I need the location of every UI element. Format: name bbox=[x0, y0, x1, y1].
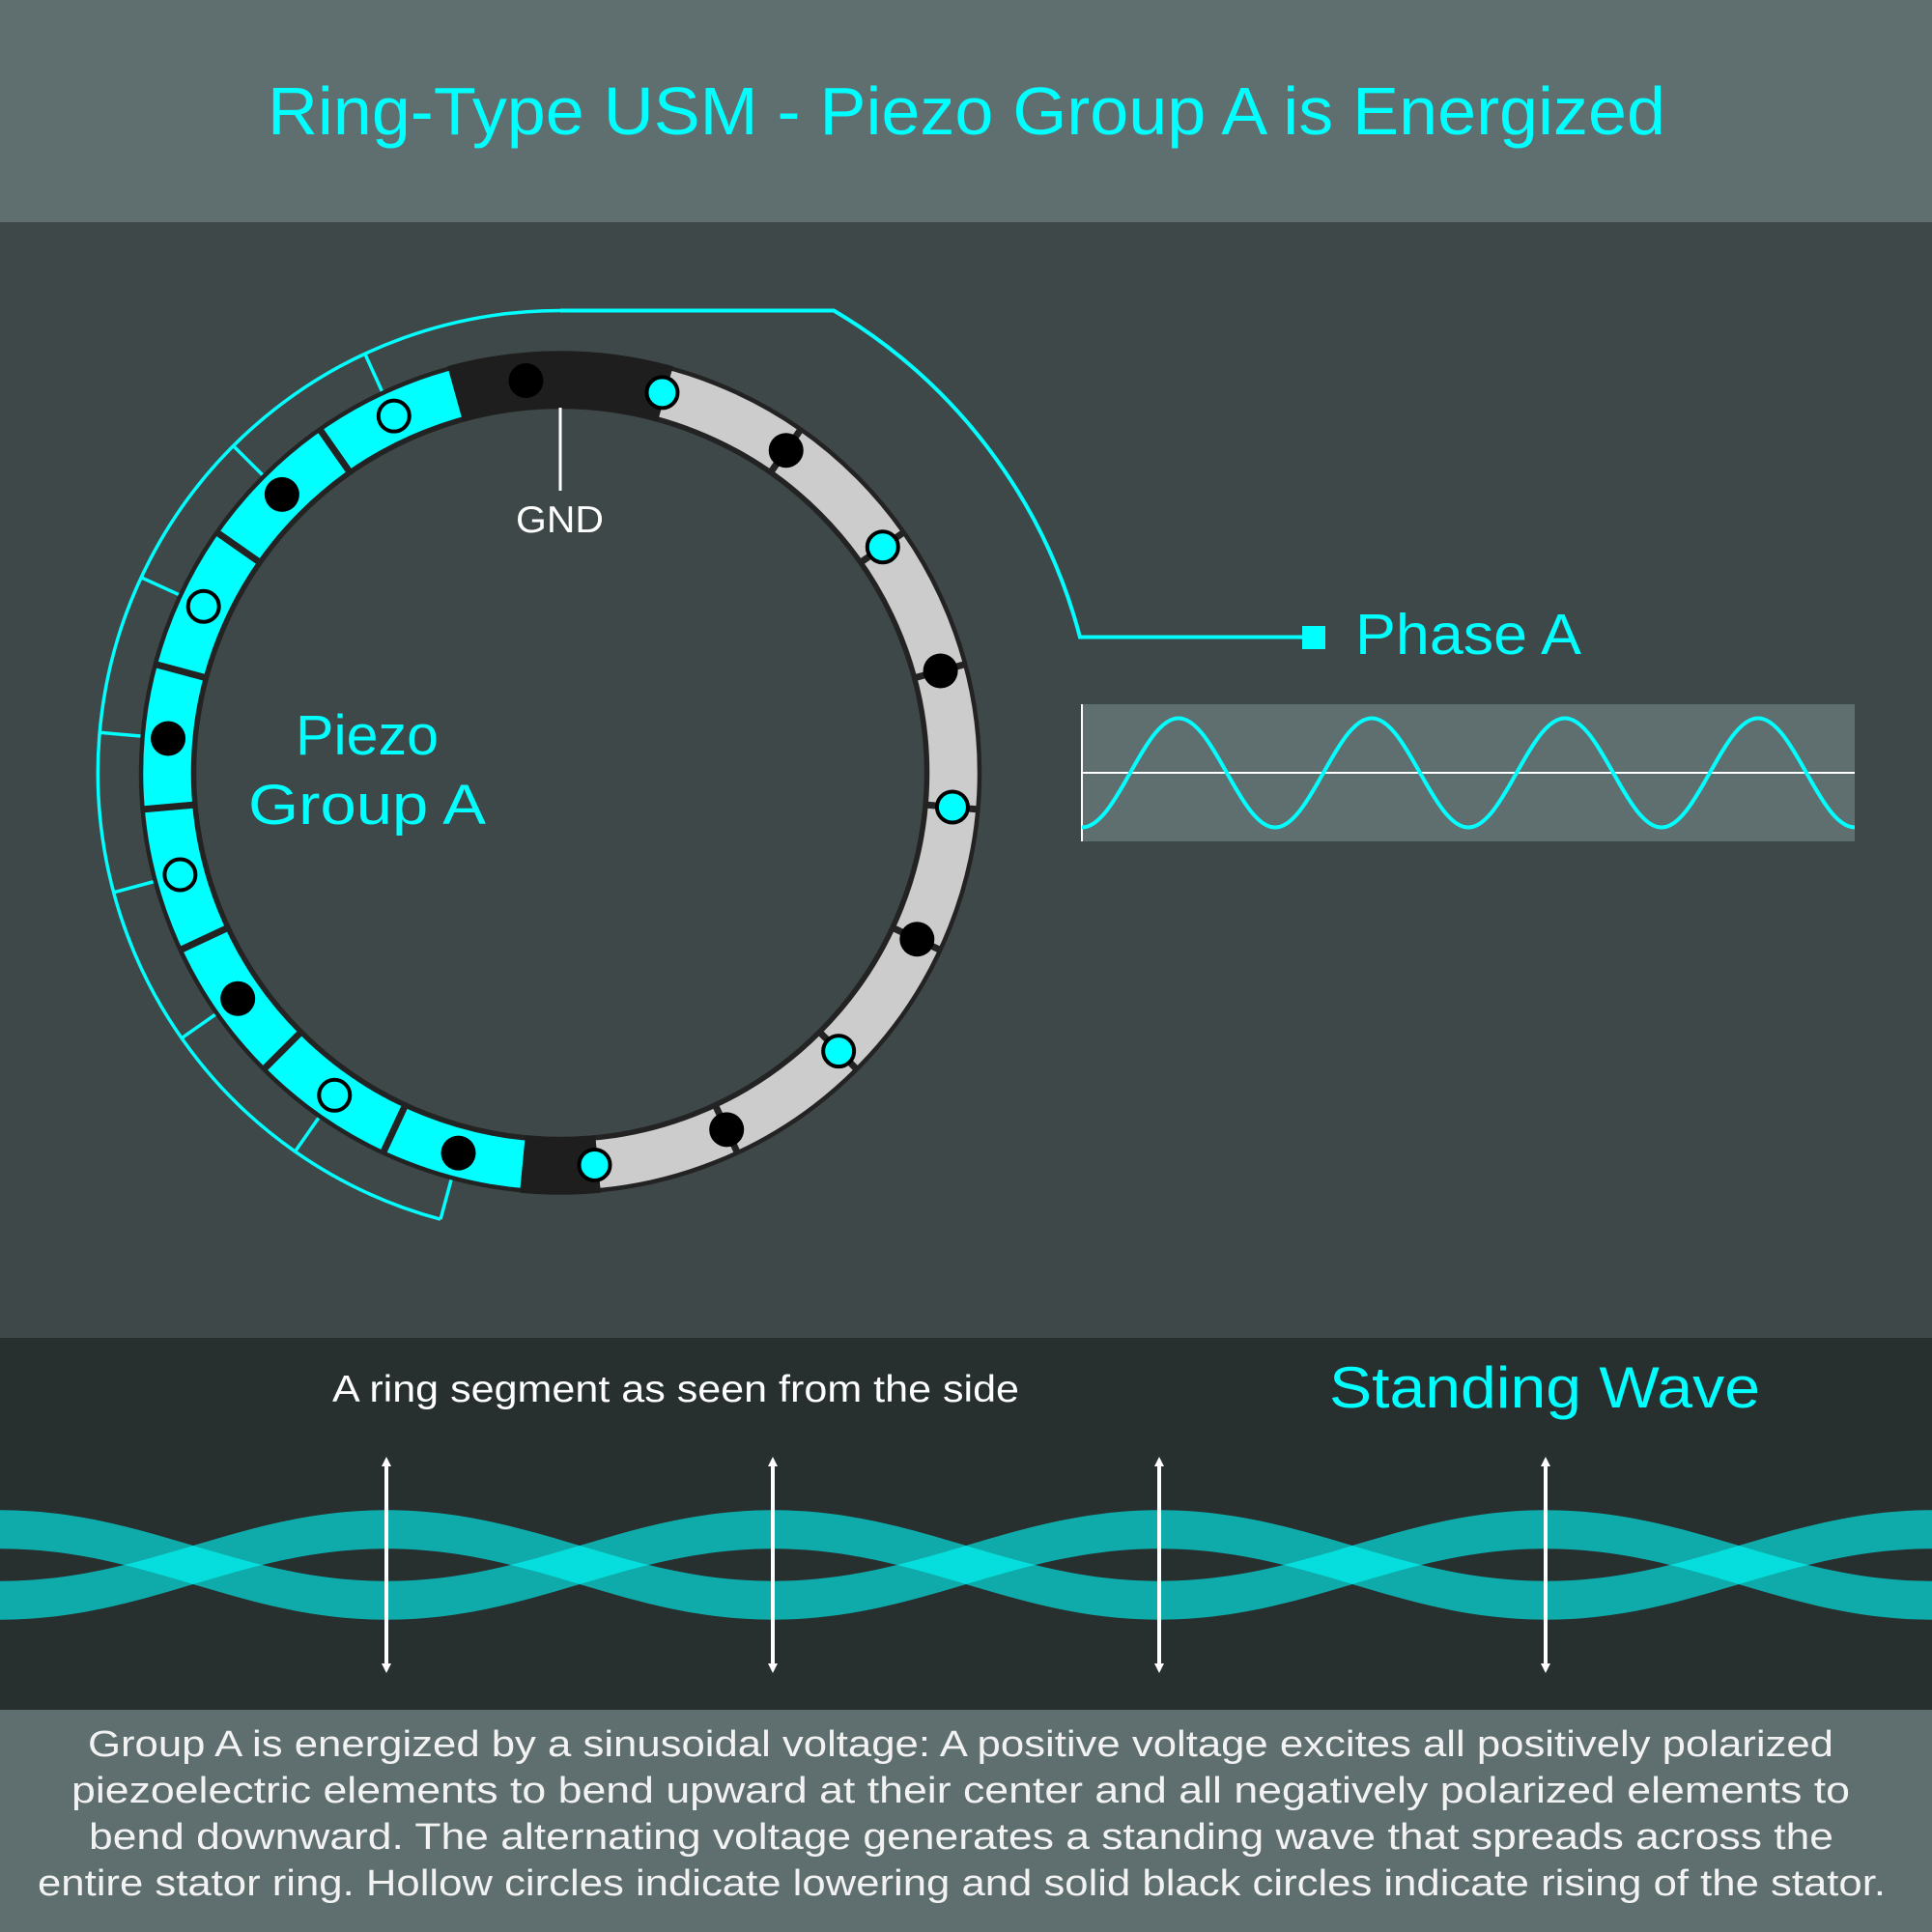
stator ring bbox=[141, 354, 980, 1192]
GND lead bbox=[558, 408, 562, 491]
wire stubs to the hollow and solid electrodes bbox=[99, 354, 452, 1219]
label: Piezo Group A: Group A bbox=[248, 774, 486, 837]
description text bbox=[38, 1724, 1886, 1904]
label: Phase A: Phase A bbox=[1355, 603, 1582, 667]
description text: bend downward. The alternating voltage generates a standing wave that spreads across the bbox=[89, 1817, 1833, 1858]
electrode dots: solid black bbox=[151, 363, 958, 1171]
panel: standing wave bbox=[0, 1338, 1932, 1710]
label: Piezo Group A: Piezo bbox=[296, 704, 439, 767]
description text: Group A is energized by a sinusoidal voltage: A positive voltage excites all positively polarized bbox=[88, 1724, 1833, 1765]
panel: ring diagram bbox=[0, 222, 1932, 1338]
arrows: antinode displacement bbox=[382, 1457, 1550, 1673]
ring: dark ground segments bbox=[455, 380, 666, 1166]
ring: energized cyan segments, Piezo Group A bbox=[167, 394, 523, 1164]
ring: outlines bbox=[141, 354, 980, 1192]
description text: piezoelectric elements to bend upward at their center and all negatively polarized elements to bbox=[71, 1771, 1850, 1811]
GND label: GND bbox=[516, 499, 604, 541]
terminal: Phase A bbox=[1302, 626, 1325, 649]
label: Piezo Group A bbox=[248, 704, 486, 837]
ring: segment dividers bbox=[143, 429, 978, 1152]
panel: description bbox=[0, 1710, 1932, 1932]
title: Ring-Type USM - Piezo Group A is Energized bbox=[268, 73, 1665, 149]
wire: Phase A feed bbox=[98, 310, 1304, 1219]
description text: entire stator ring. Hollow circles indicate lowering and solid black circles indicate rising of the stator. bbox=[38, 1863, 1886, 1904]
caption: ring segment: A ring segment as seen from the side bbox=[332, 1369, 1019, 1410]
electrode dots: hollow cyan bbox=[164, 377, 968, 1180]
heading: Standing Wave: Standing Wave bbox=[1329, 1355, 1760, 1420]
wave bands bbox=[0, 1510, 1932, 1620]
panel: header bbox=[0, 0, 1932, 222]
chart: sinusoidal voltage bbox=[1081, 704, 1855, 841]
ring: inactive gray segments bbox=[598, 394, 953, 1164]
